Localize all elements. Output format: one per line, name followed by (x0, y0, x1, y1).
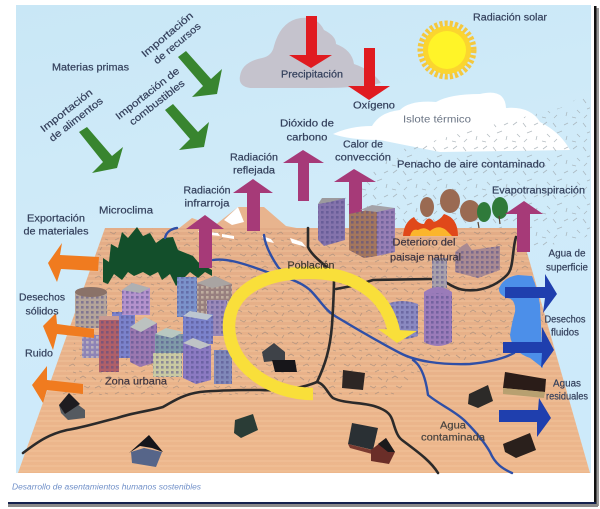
label: food imports: Importación (39, 87, 95, 135)
building: mauve block (207, 300, 227, 336)
arrow: reflected radiation (233, 179, 273, 231)
caption: Desarrollo de asentamientos humanos sostenibles (12, 482, 201, 492)
house (342, 370, 365, 390)
grey rain cloud (240, 18, 381, 88)
label: infrared radiation: Radiación (184, 186, 230, 196)
mountains (178, 207, 302, 230)
label: materials export: de materiales (24, 226, 88, 238)
arrow: solid waste (43, 313, 94, 350)
label: noise: Ruido (25, 348, 53, 360)
label: reflected radiation: Radiación (230, 152, 278, 164)
arrow: precipitation (289, 16, 332, 68)
label: population: Población (288, 260, 334, 272)
house (348, 423, 378, 454)
land plane (18, 228, 590, 473)
buildings: right group (387, 258, 452, 346)
arrow: oxygen (348, 48, 390, 100)
roads (23, 228, 516, 473)
label: convection heat: convección (335, 152, 391, 164)
long house (503, 372, 546, 398)
label: convection heat: Calor de (343, 140, 383, 150)
building: pale yellow block (153, 353, 182, 377)
label: precipitation: Precipitación (281, 70, 343, 80)
building: left tower (318, 198, 345, 246)
label: contaminated water (421, 420, 485, 444)
label: food imports: de alimentos (47, 96, 105, 144)
label: surface water: superficie (546, 262, 588, 274)
label: liquid waste (544, 314, 586, 338)
building: periwinkle block (183, 311, 213, 344)
building: slim tower (432, 258, 447, 288)
house (59, 393, 85, 420)
building: blue block (112, 312, 135, 358)
building: small round tower (387, 301, 418, 339)
label: carbon dioxide: Dióxido de (280, 118, 334, 130)
label: solid waste (19, 292, 65, 318)
building: small block (214, 350, 232, 384)
lake (499, 275, 543, 368)
building: rose block (99, 316, 119, 372)
label: wastewater: residuales (546, 392, 588, 402)
building: brick tower (349, 208, 377, 258)
building: brown tower (197, 276, 232, 314)
label: resource imports: de recursos (152, 21, 203, 67)
arrow: materials export (48, 243, 99, 282)
label: solid waste: sólidos (26, 306, 58, 318)
label: reflected radiation: reflejada (233, 166, 275, 176)
burnt trees (420, 189, 480, 222)
arrow: evapotranspiration (505, 201, 543, 252)
label: natural landscape deterioration (390, 238, 461, 264)
building: purple block (130, 317, 157, 367)
label: solid waste: Desechos (19, 292, 65, 304)
building: front purple block (183, 338, 211, 384)
building: teal block (155, 328, 183, 353)
label: surface water: Agua de (548, 248, 586, 260)
arrow: carbon dioxide (283, 150, 324, 201)
building: large round tower (424, 287, 452, 346)
arrow: noise (32, 366, 83, 403)
white cloud (333, 93, 570, 152)
building: low rear block (82, 335, 100, 358)
forest (103, 227, 212, 286)
building: mauve tower (360, 205, 395, 256)
label: contaminated water: Agua (440, 420, 466, 432)
label: natural landscape deterioration: paisaje natural (390, 252, 461, 264)
arrow: fuel imports (165, 104, 209, 150)
house (129, 435, 163, 467)
buildings: natural landscape deterioration (455, 243, 500, 278)
flames (403, 214, 458, 236)
label: wastewater: Aguas (553, 378, 581, 390)
label: carbon dioxide: carbono (286, 132, 328, 144)
label: wastewater (546, 378, 588, 402)
arrow: surface water (505, 274, 557, 313)
label: urban zone: Zona urbana (105, 376, 167, 388)
rivers (165, 228, 514, 473)
building: lilac rear block (122, 283, 150, 315)
polluted air plume (345, 92, 590, 250)
house (371, 438, 395, 464)
label: resource imports (140, 10, 204, 70)
house (262, 343, 297, 372)
label: infrared radiation (184, 186, 230, 210)
label: solar radiation: Radiación solar (473, 12, 548, 24)
building: blue tower (177, 277, 197, 317)
label: contaminated water: contaminada (421, 432, 485, 444)
label: oxygen: Oxígeno (353, 100, 395, 112)
icon: sun (421, 24, 473, 76)
house (503, 433, 536, 458)
label: carbon dioxide (280, 118, 334, 144)
label: natural landscape deterioration: Deterioro del (392, 238, 456, 248)
buildings: urban zone (75, 276, 232, 384)
label: food imports (39, 86, 105, 145)
arrow: convection heat (334, 169, 376, 222)
arrow: food imports (79, 127, 123, 173)
flames and burnt trees (403, 189, 508, 236)
arrow: infrared radiation (186, 215, 224, 268)
buildings: upper centre (318, 198, 395, 258)
building: round tower (75, 287, 107, 328)
arrow: wastewater (499, 398, 551, 437)
arrow: population cycle (229, 273, 417, 394)
label: heat island: Islote térmico (403, 114, 471, 126)
label: fuel imports: Importación de (114, 65, 182, 122)
label: polluted air plume: Penacho de aire contaminado (397, 160, 545, 170)
label: materials export: Exportación (27, 214, 85, 224)
label: raw materials: Materias primas (52, 62, 129, 74)
label: surface water (546, 248, 588, 274)
houses (59, 343, 546, 467)
label: materials export (24, 214, 88, 238)
label: resource imports: Importación (140, 10, 196, 60)
label: fuel imports (114, 65, 190, 133)
arrow: resource imports (178, 51, 222, 97)
arrow: liquid waste (503, 327, 554, 368)
house (468, 385, 493, 408)
label: convection heat (335, 140, 391, 164)
label: liquid waste: fluidos (551, 328, 579, 338)
label: infrared radiation: infrarroja (184, 198, 230, 210)
green trees (477, 197, 508, 228)
label: fuel imports: combustibles (128, 78, 187, 128)
label: evapotranspiration: Evapotranspiración (492, 186, 585, 196)
label: reflected radiation (230, 152, 278, 176)
label: liquid waste: Desechos (544, 314, 586, 326)
label: microclimate: Microclima (99, 206, 153, 216)
house (234, 414, 258, 438)
